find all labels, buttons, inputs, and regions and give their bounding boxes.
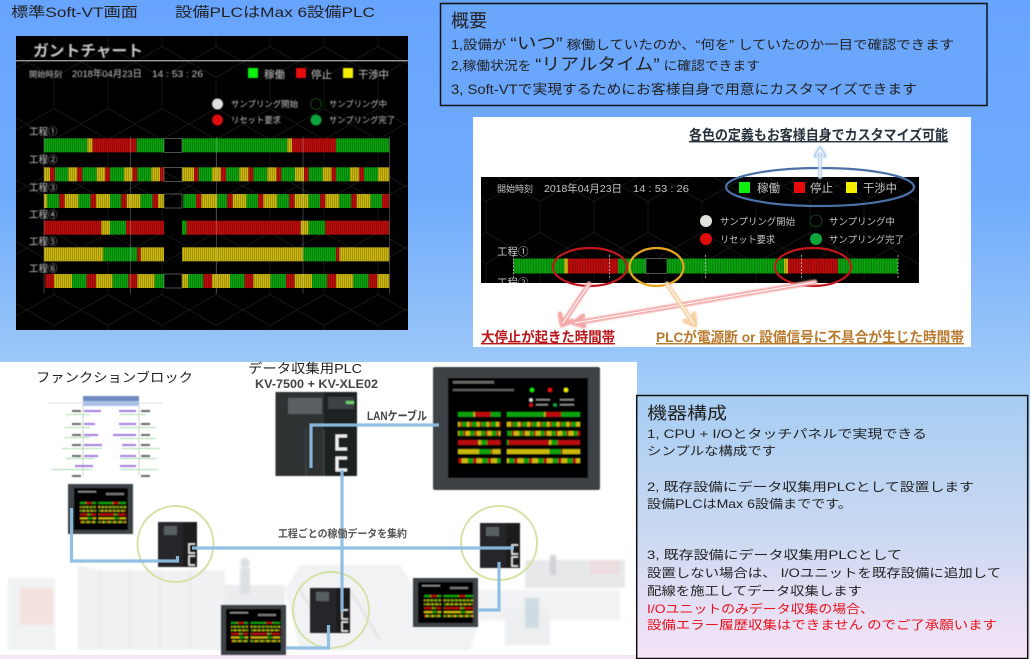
overview line 2: 2,稼働状況を “リアルタイム” に確認できます [451, 55, 760, 74]
sampling legend: リセット要求 [231, 115, 281, 125]
small PLC units [158, 522, 520, 633]
arrow: up to customisation title [815, 148, 825, 177]
strip colour legend: 干渉中 [863, 181, 897, 195]
sampling legend: サンプリング中 [329, 99, 387, 109]
status colour legend: 停止 [311, 68, 332, 81]
strip colour legend [739, 181, 897, 195]
strip process labels: 工程① [497, 246, 529, 258]
heading: data collection PLC: データ収集用PLC [248, 361, 362, 376]
item 1 [647, 427, 927, 458]
panel: colour customisation callout [473, 117, 971, 347]
overview heading: 概要 [451, 11, 487, 31]
item 3: 配線を施工してデータ収集します [647, 583, 862, 598]
process labels: 工程② [29, 155, 58, 166]
process labels: 工程⑥ [29, 264, 58, 275]
strip sampling legend: サンプリング開始 [720, 216, 795, 228]
item 2 [647, 479, 974, 511]
label: major stop: 大停止が起きた時間帯 [481, 329, 615, 345]
status colour legend [248, 68, 389, 81]
sampling legend [212, 98, 395, 126]
heading: standard Soft-VT screen: 設備PLCはMax 6設備PLC [175, 4, 375, 20]
label: aggregation: 工程ごとの稼働データを集約 [278, 527, 407, 540]
item 1: 1, CPU + I/Oとタッチパネルで実現できる [647, 427, 927, 441]
strip colour legend: 稼働 [757, 182, 780, 195]
heading: data collection PLC: KV-7500 + KV-XLE02 [255, 377, 378, 391]
heading: standard Soft-VT screen: 標準Soft-VT画面 [11, 4, 138, 20]
process labels: 工程① [29, 127, 58, 138]
status colour legend: 稼働 [264, 68, 285, 81]
strip start time [497, 182, 689, 195]
strip process labels [498, 246, 528, 283]
start time [29, 68, 203, 80]
panel: system diagram [0, 361, 637, 655]
status colour legend: 干渉中 [358, 68, 389, 81]
heading: standard Soft-VT screen [11, 4, 375, 20]
small PLC highlight circles [138, 506, 537, 648]
strip process labels: 工程② [497, 277, 529, 289]
overview line 3: 3, Soft-VTで実現するためにお客様自身で用意にカスタマイズできます [451, 81, 917, 97]
strip start time: 開始時刻 [497, 183, 533, 194]
process labels [29, 127, 58, 275]
main PLC unit [276, 392, 357, 476]
item 3 [647, 547, 1001, 598]
item 2: 設備PLCはMax 6設備までです。 [647, 497, 852, 511]
configuration heading: 機器構成 [647, 404, 727, 423]
red note [647, 601, 997, 632]
item 3: 設置しない場合は、 I/Oユニットを既存設備に追加して [647, 565, 1001, 580]
red note: I/Oユニットのみデータ収集の場合、 [647, 601, 874, 616]
overview line 1: 1,設備が “いつ” 稼働していたのか、“何を” していたのか一目で確認できます [451, 34, 954, 53]
sampling legend: サンプリング開始 [231, 99, 298, 109]
label: LAN cable: LANケーブル [367, 408, 427, 423]
arrows: pink to major stop label [560, 282, 815, 326]
label: power loss: PLCが電源断 or 設備信号に不具合が生じた時間帯 [656, 329, 964, 345]
sampling legend: サンプリング完了 [329, 115, 395, 125]
panel: equipment configuration [637, 396, 1028, 658]
process labels: 工程④ [29, 210, 58, 221]
panel: overview [440, 4, 987, 106]
strip start time: 2018年04月23日 [544, 182, 622, 195]
gantt bars [44, 137, 389, 293]
legend highlight ellipse [726, 168, 914, 206]
process labels: 工程⑤ [29, 237, 58, 248]
item 2: 2, 既存設備にデータ収集用PLCとして設置します [647, 479, 974, 494]
gantt strip excerpt [481, 177, 919, 289]
panel: gantt chart screen [16, 36, 408, 330]
function block diagram [49, 396, 163, 477]
start time: 2018年04月23日 [72, 68, 142, 80]
highlight ellipses on bar [553, 248, 851, 286]
item 3: 3, 既存設備にデータ収集用PLCとして [647, 547, 902, 562]
heading: data collection PLC [248, 361, 378, 391]
strip sampling legend: サンプリング完了 [829, 234, 904, 246]
strip colour legend: 停止 [810, 182, 833, 195]
strip sampling legend: リセット要求 [720, 234, 775, 246]
factory line illustration [8, 555, 625, 650]
strip start time: 14 : 53 : 26 [633, 183, 689, 195]
heading: function block: ファンクションブロック [36, 370, 193, 385]
process labels: 工程③ [29, 183, 58, 194]
strip bar [514, 255, 898, 279]
main touch panel [433, 367, 600, 490]
callout title: 各色の定義もお客様自身でカスタマイズ可能 [689, 127, 948, 143]
start time: 14 : 53 : 26 [152, 69, 203, 80]
item 1: シンプルな構成です [647, 444, 776, 458]
strip sampling legend: サンプリング中 [829, 216, 895, 228]
red note: 設備エラー履歴収集はできません のでご了承願います [647, 617, 997, 632]
arrow: orange to power-loss label [667, 284, 695, 325]
start time: 開始時刻 [29, 69, 62, 79]
small touch panels [68, 484, 478, 655]
strip sampling legend [700, 215, 904, 246]
gantt title: ガントチャート [33, 42, 143, 60]
network cables [72, 425, 514, 648]
